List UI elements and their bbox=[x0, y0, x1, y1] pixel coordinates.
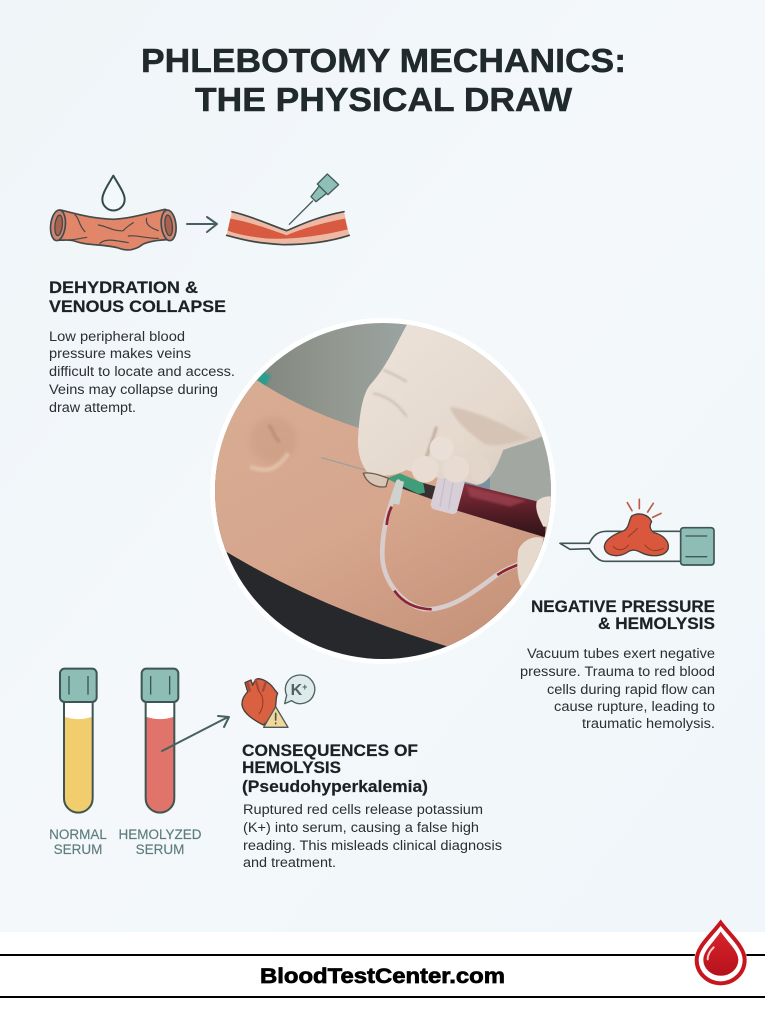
text: negative pressure body: cause rupture, leading to bbox=[554, 699, 715, 715]
footer band bbox=[0, 932, 765, 1024]
heading: consequences: HEMOLYSIS bbox=[242, 758, 341, 777]
heading: consequences bbox=[242, 741, 428, 796]
heading: dehydration bbox=[49, 278, 226, 316]
needle holder hub bbox=[402, 482, 436, 500]
photo background bbox=[210, 315, 560, 555]
heading: consequences: (Pseudohyperkalemia) bbox=[242, 777, 428, 796]
tube collar bbox=[430, 478, 465, 514]
heading: negative pressure: NEGATIVE PRESSURE bbox=[531, 597, 715, 616]
title: PHLEBOTOMY MECHANICS: bbox=[141, 42, 626, 79]
icon: collapsed vein with needle bbox=[227, 174, 349, 245]
footer text: BloodTestCenter.com bbox=[260, 965, 505, 988]
text: dehydration body: draw attempt. bbox=[49, 400, 136, 416]
text: dehydration body: Veins may collapse during bbox=[49, 382, 218, 398]
logo: blood drop bbox=[694, 919, 747, 986]
text: negative pressure body: Vacuum tubes exert negative bbox=[527, 646, 715, 662]
heading: dehydration: VENOUS COLLAPSE bbox=[49, 297, 226, 316]
forearm bbox=[215, 324, 551, 646]
photo: blood draw from arm bbox=[210, 318, 556, 664]
icon text: K+: + bbox=[302, 682, 307, 692]
text: negative pressure body bbox=[520, 646, 715, 732]
text: negative pressure body: traumatic hemolysis. bbox=[582, 716, 715, 732]
title bbox=[141, 42, 626, 118]
arrow: vein to collapse bbox=[187, 217, 217, 232]
heading: dehydration: DEHYDRATION & bbox=[49, 278, 198, 297]
icon: hemolyzed serum tube bbox=[142, 669, 178, 813]
tube labels bbox=[49, 827, 202, 857]
gloved hand bbox=[358, 324, 542, 485]
icon: heart, potassium and warning bbox=[242, 675, 315, 727]
blood tube bbox=[455, 482, 547, 537]
text: negative pressure body: pressure. Trauma to red blood bbox=[520, 664, 715, 680]
text: consequences body: Ruptured red cells release potassium bbox=[243, 802, 483, 818]
flexible tubing bbox=[382, 482, 538, 609]
title: THE PHYSICAL DRAW bbox=[195, 81, 573, 118]
text: consequences body: (K+) into serum, causing a false high bbox=[243, 820, 479, 836]
text: dehydration body: Low peripheral blood bbox=[49, 329, 185, 345]
text: dehydration body: difficult to locate and access. bbox=[49, 364, 235, 380]
text: dehydration body bbox=[49, 329, 235, 416]
dark table bbox=[218, 520, 548, 659]
icon: vacuum tube with ruptured cell bbox=[560, 499, 714, 565]
text: negative pressure body: cells during rapid flow can bbox=[547, 682, 715, 698]
tube labels: SERUM bbox=[136, 842, 184, 857]
text: consequences body: reading. This misleads clinical diagnosis bbox=[243, 838, 502, 854]
tube labels: HEMOLYZED bbox=[118, 827, 202, 842]
heading: consequences: CONSEQUENCES OF bbox=[242, 741, 418, 760]
text: dehydration body: pressure makes veins bbox=[49, 346, 191, 362]
heading: negative pressure bbox=[531, 597, 715, 633]
text: consequences body: and treatment. bbox=[243, 855, 336, 871]
icon: normal serum tube bbox=[60, 669, 97, 813]
tube labels: SERUM bbox=[54, 842, 102, 857]
text: consequences body bbox=[243, 802, 502, 871]
icon: dehydrated vein bbox=[49, 209, 178, 250]
teal cloth bbox=[255, 371, 272, 386]
needle bbox=[322, 458, 365, 470]
heading: negative pressure: & HEMOLYSIS bbox=[598, 614, 715, 633]
icon text: K+: K bbox=[291, 682, 302, 699]
gloved fingers at tube bbox=[536, 496, 551, 527]
arrow: hemolyzed tube to consequences bbox=[162, 716, 229, 751]
tube labels: NORMAL bbox=[49, 827, 107, 842]
icon: water drop bbox=[102, 176, 125, 210]
